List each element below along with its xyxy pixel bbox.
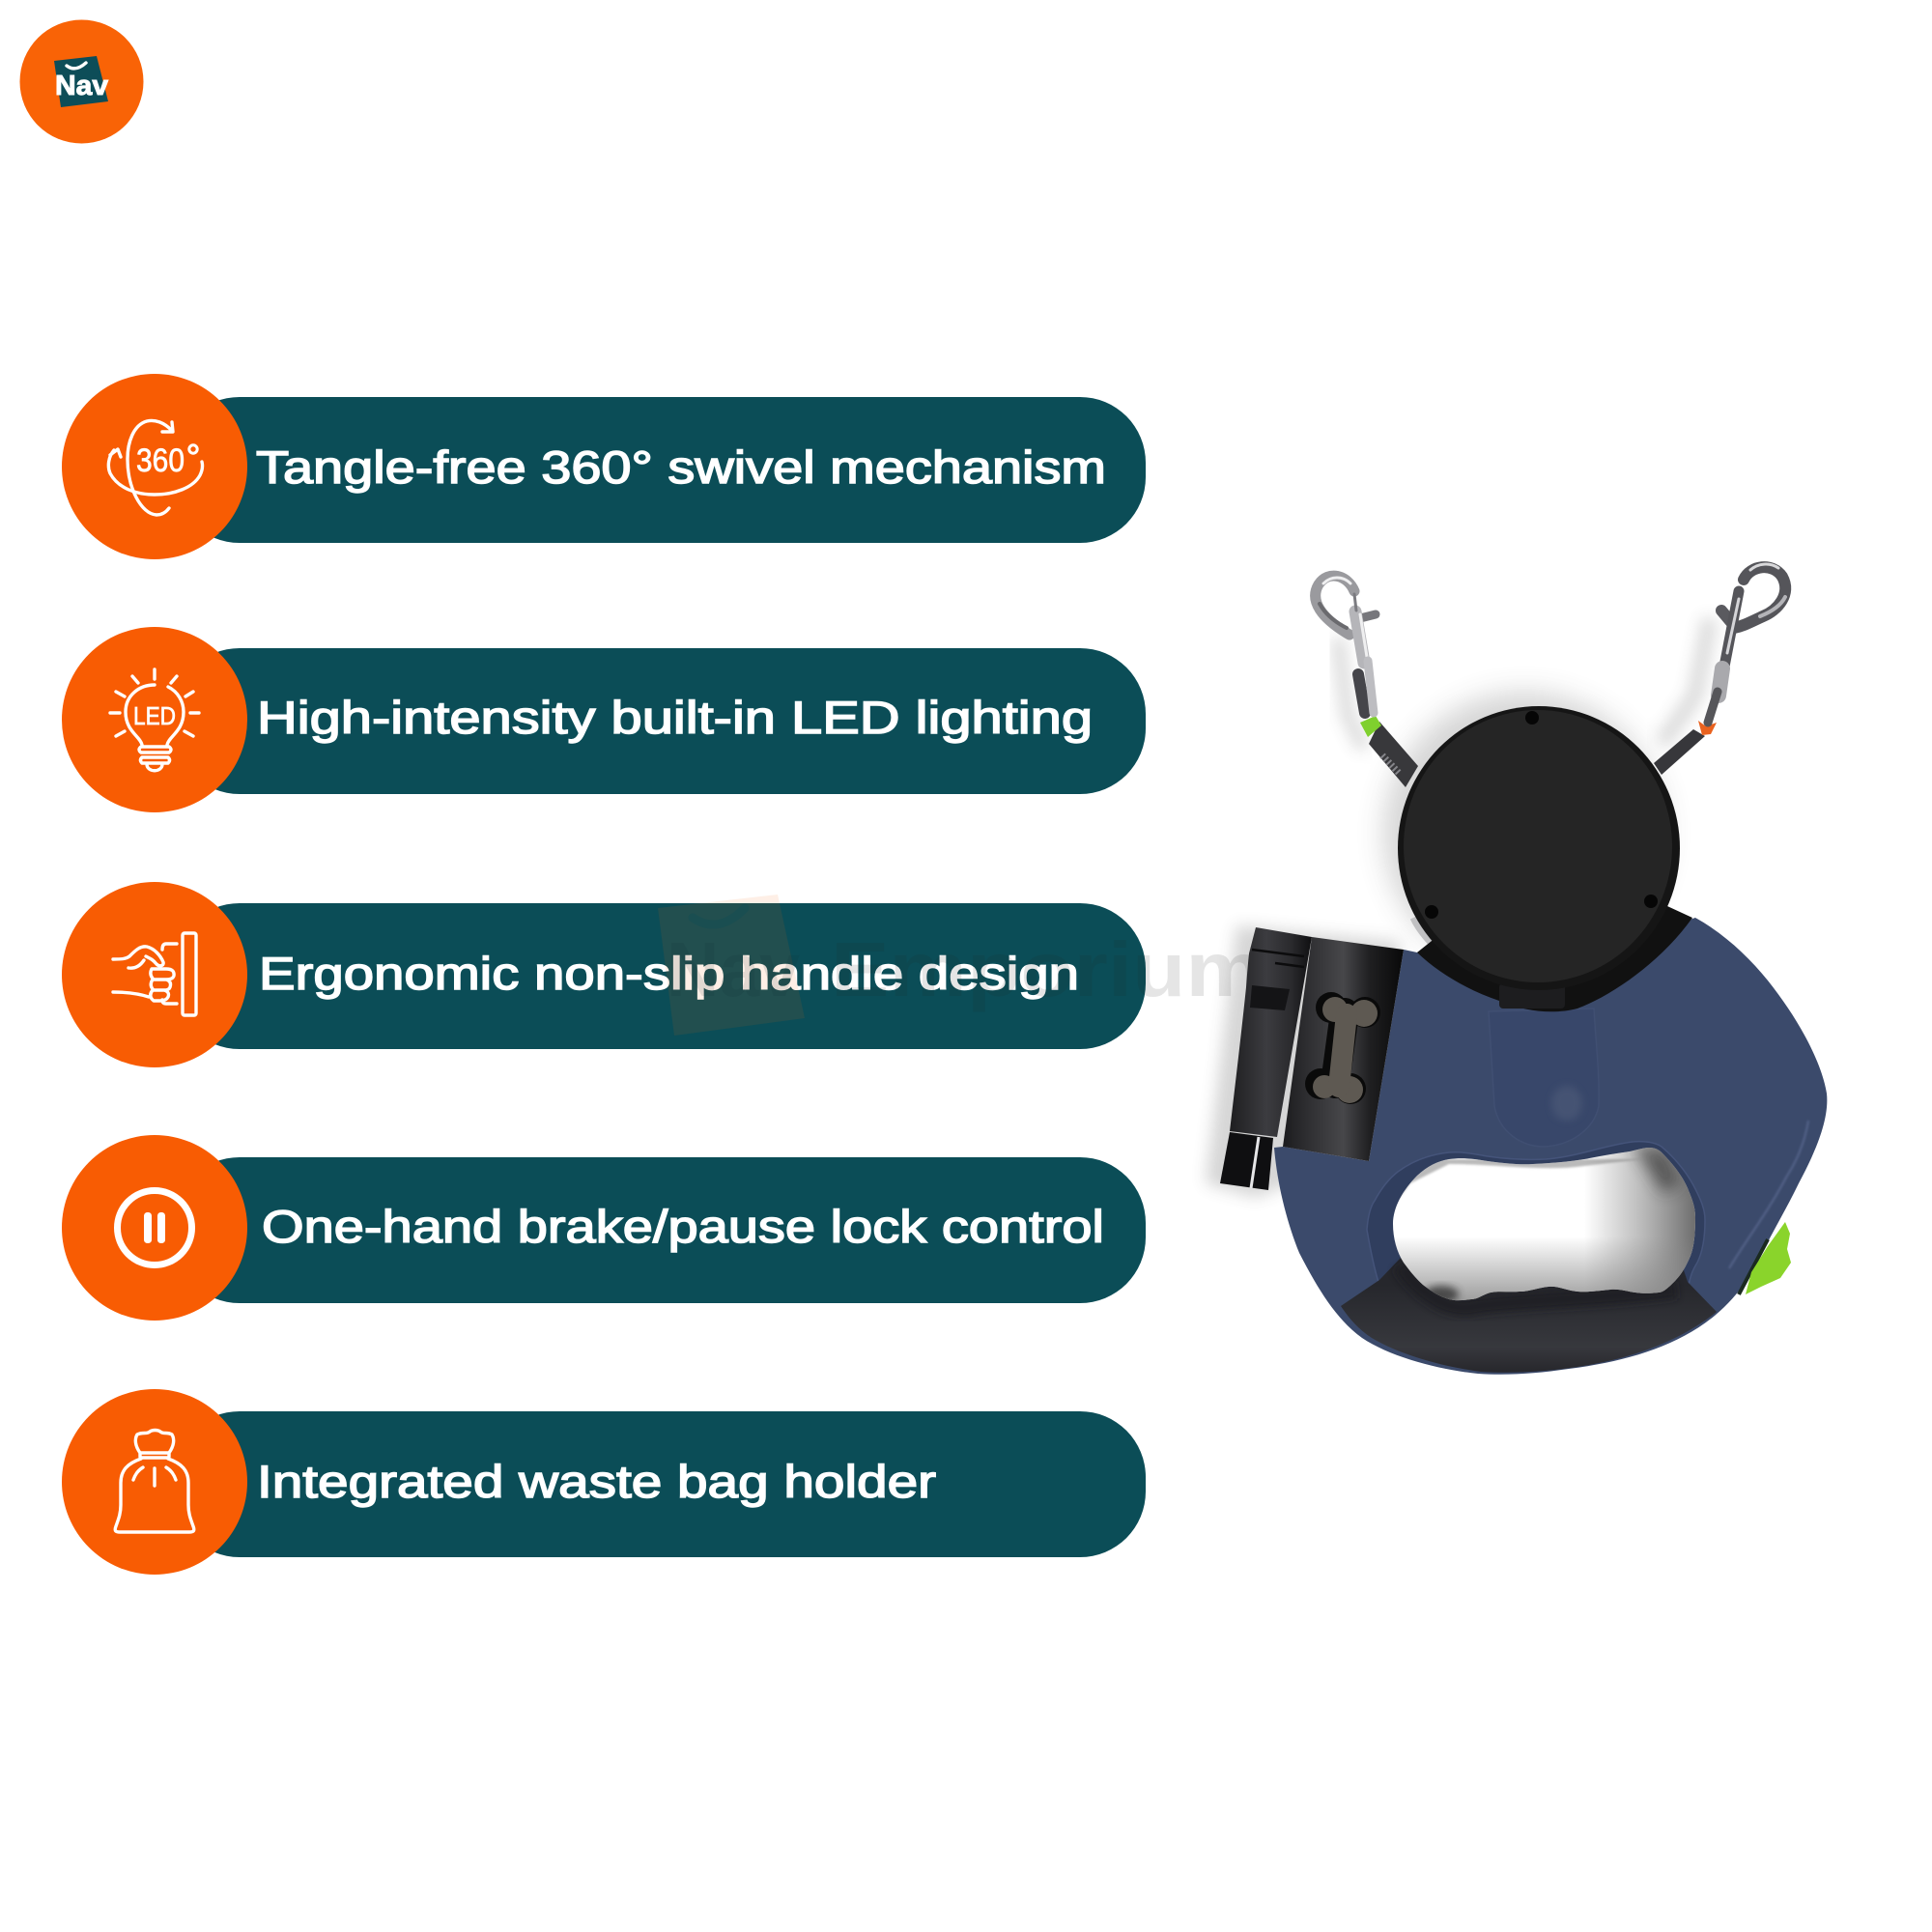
watermark name: Emporium — [831, 926, 1264, 1012]
icon: LED bulb — [62, 627, 247, 812]
orange band — [1698, 721, 1717, 735]
logo bag mark — [54, 56, 108, 107]
latch — [1721, 611, 1731, 622]
bar — [174, 397, 1146, 543]
thumb channel — [1489, 1009, 1615, 1147]
label: Tangle-free 360° swivel mechanism — [256, 441, 1106, 493]
watermark wordmark: Nav — [667, 926, 800, 1012]
icon: hand gripping handle — [62, 882, 247, 1067]
horizontal orbit with arrow — [108, 449, 203, 495]
LED label: LED — [133, 701, 176, 730]
feature row: swivel mechanism — [174, 397, 1146, 543]
spring — [1358, 674, 1365, 713]
label: Integrated waste bag holder — [257, 1456, 936, 1507]
waste bag holder — [1283, 937, 1404, 1161]
pause bars — [144, 1212, 152, 1243]
swivel — [1368, 661, 1374, 713]
bar — [174, 1157, 1146, 1303]
left clip — [1316, 576, 1376, 713]
hand opening — [1393, 1148, 1695, 1300]
feature row: LED lighting — [174, 648, 1146, 794]
logo badge — [19, 19, 143, 143]
bag top — [135, 1430, 174, 1453]
reel disc — [1398, 706, 1680, 990]
watermark smile — [693, 908, 745, 924]
body ridge line — [1729, 1121, 1808, 1268]
gate — [1354, 594, 1356, 611]
bag creases — [133, 1467, 176, 1486]
disc screw top — [1525, 711, 1539, 724]
watermark — [658, 895, 1264, 1036]
product: dual dog leash — [1206, 564, 1827, 1375]
bone cut-out — [1305, 992, 1380, 1104]
right clip — [1708, 564, 1785, 723]
feature row: handle design — [174, 903, 1146, 1049]
degree sign — [189, 445, 197, 453]
swivel — [1719, 668, 1722, 696]
bag body — [115, 1459, 194, 1532]
vertical orbit with arrow — [128, 420, 173, 515]
icon: 360 swivel — [62, 374, 247, 559]
bone inner — [1313, 997, 1378, 1103]
rubber grip — [1341, 1258, 1717, 1373]
hook — [1316, 576, 1354, 635]
icon: waste bag — [62, 1389, 247, 1575]
handle bar — [183, 933, 196, 1015]
watermark bag — [658, 895, 805, 1036]
disc screw right — [1644, 895, 1658, 908]
hook — [1734, 567, 1785, 628]
pause bar right — [157, 1212, 165, 1243]
logo smile — [67, 63, 86, 69]
icon: pause — [62, 1135, 247, 1321]
bulb base — [139, 747, 171, 771]
shaft — [1355, 611, 1364, 663]
bulb outline — [126, 685, 184, 745]
disc face — [1404, 710, 1672, 982]
light rays — [110, 669, 199, 736]
flashlight grooves — [1252, 950, 1304, 967]
360 label: 360 — [136, 442, 185, 479]
disc rim highlight — [1413, 918, 1497, 993]
infographic canvas — [19, 19, 1828, 1575]
left leash strap — [1360, 716, 1418, 787]
label: One-hand brake/pause lock control — [262, 1201, 1104, 1252]
soft shadows — [1206, 618, 1710, 1198]
bar — [174, 1411, 1146, 1557]
bar — [174, 648, 1146, 794]
handle body — [1274, 869, 1827, 1375]
logo wordmark: Nav — [55, 71, 108, 101]
label: High-intensity built-in LED lighting — [257, 692, 1093, 743]
flashlight dark band — [1250, 985, 1290, 1010]
feature row: waste bag holder — [174, 1411, 1146, 1557]
feature row: brake control — [174, 1157, 1146, 1303]
black collar — [1417, 850, 1692, 1011]
side ridge — [1611, 1010, 1619, 1063]
channel highlight — [1551, 1086, 1582, 1121]
flashlight — [1220, 927, 1312, 1190]
shaft — [1724, 591, 1739, 667]
label: Ergonomic non-slip handle design — [259, 948, 1079, 999]
right leash strap — [1654, 721, 1717, 775]
green brake button — [1739, 1222, 1791, 1294]
fist — [113, 947, 174, 1001]
hand opening rim — [1367, 1142, 1705, 1290]
tip highlight — [1251, 1137, 1259, 1188]
disc screw left — [1425, 905, 1438, 919]
green band — [1360, 716, 1381, 737]
flashlight tip — [1220, 1132, 1273, 1190]
opening inner shading — [1395, 1148, 1695, 1300]
grip inner shadow band — [1401, 1265, 1676, 1308]
brackets — [162, 944, 177, 1004]
bar — [174, 903, 1146, 1049]
collar stem — [1499, 983, 1565, 1009]
latch — [1360, 614, 1376, 618]
bag tie — [140, 1453, 169, 1458]
pause ring — [118, 1190, 191, 1265]
strap stitching — [1382, 755, 1399, 773]
